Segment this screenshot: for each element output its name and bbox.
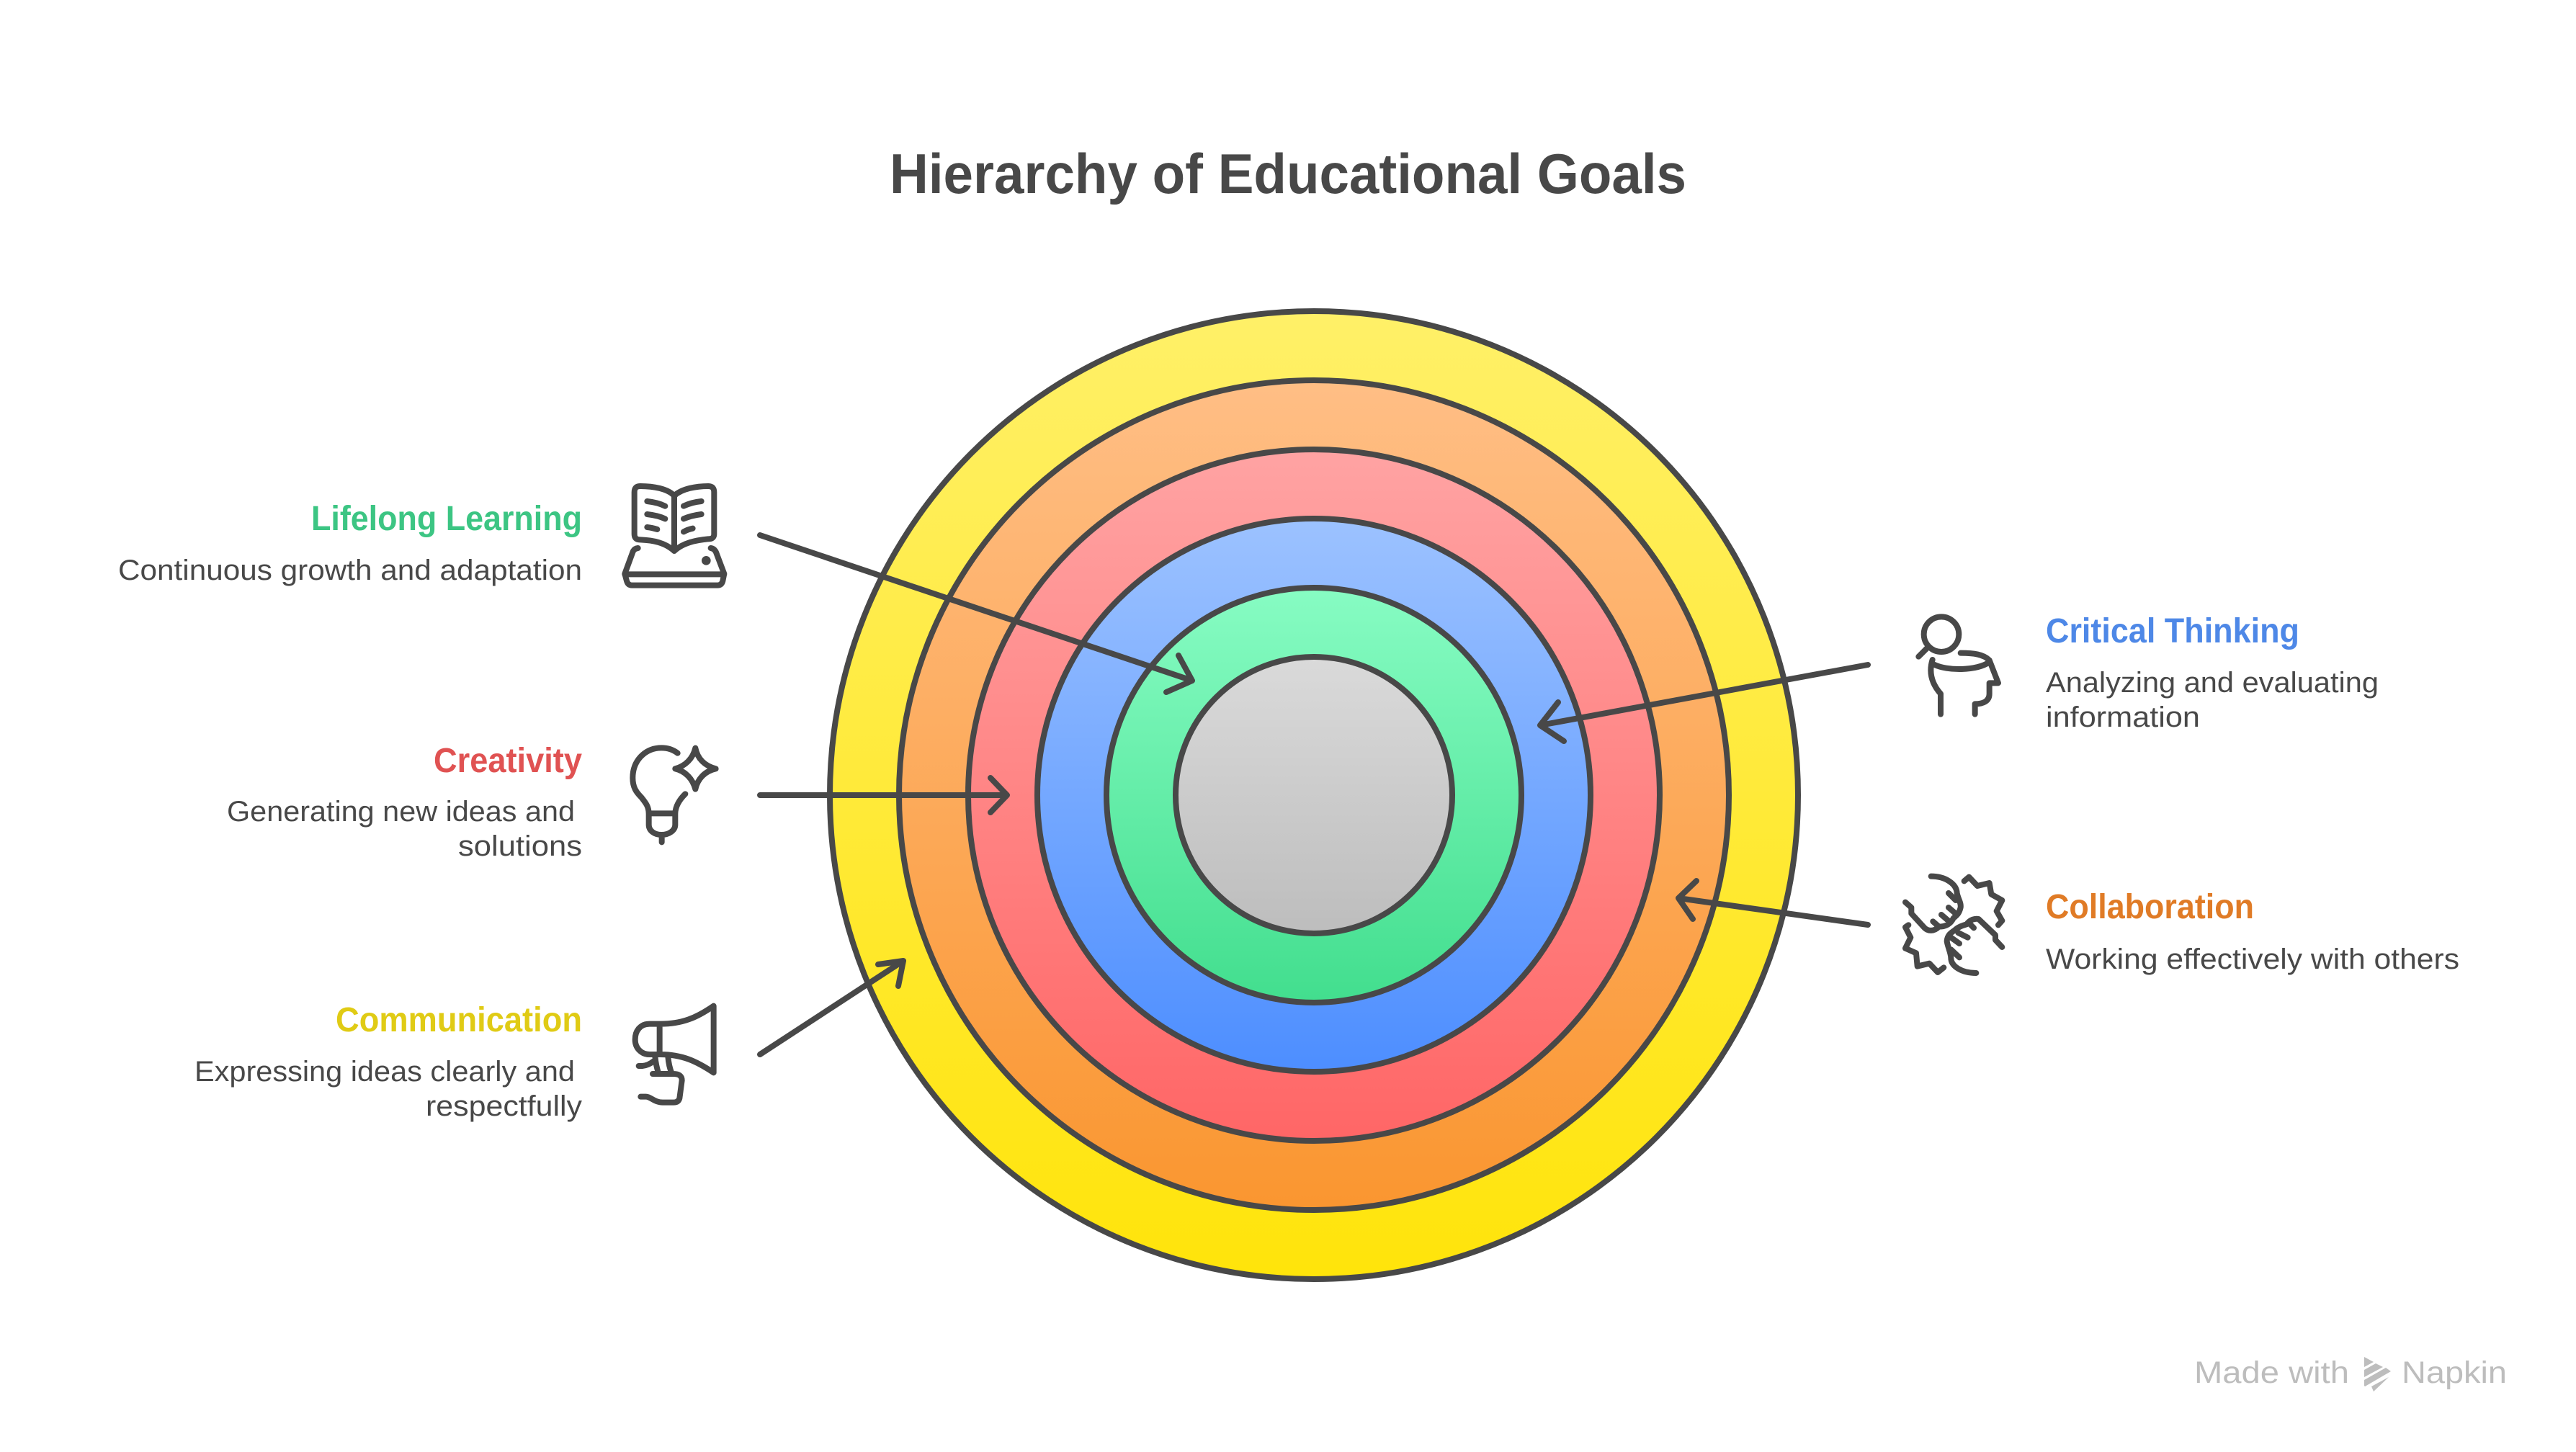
ring: lifelong learning: [1106, 588, 1521, 1003]
arrow: creativity: [760, 778, 1007, 812]
ring: creativity: [968, 449, 1660, 1141]
description: communication: respectfully: [426, 1090, 582, 1122]
ring: critical thinking: [1037, 519, 1591, 1072]
description: creativity: Generating new ideas and: [227, 796, 575, 828]
icon: open book on tablet: [625, 486, 724, 586]
icon: light bulb with sparkle: [632, 748, 716, 842]
arrow: lifelong learning: [760, 535, 1192, 692]
panel: lifelong learning: [118, 500, 582, 586]
heading: collaboration: Collaboration: [2046, 888, 2254, 926]
title: Hierarchy of Educational Goals: [890, 142, 1686, 205]
footer: made with napkin: [2194, 1355, 2507, 1392]
chart: concentric goal circles: [830, 311, 1798, 1279]
arrow: critical thinking: [1540, 665, 1868, 741]
icon: napkin logo: [2364, 1357, 2391, 1392]
panel: creativity: [227, 742, 582, 862]
icon: head with magnifier: [1918, 617, 1998, 714]
panel: communication: [194, 1001, 582, 1122]
ring: communication: [830, 311, 1798, 1279]
description: creativity: solutions: [458, 830, 582, 862]
icon: megaphone in hand: [635, 1006, 714, 1103]
heading: communication: Communication: [336, 1001, 582, 1039]
arrow: collaboration: [1678, 881, 1868, 925]
icon: clasped hands: [1905, 877, 2002, 973]
description: lifelong learning: Continuous growth and adaptation: [118, 555, 582, 586]
panel: collaboration: [2046, 888, 2459, 975]
heading: creativity: Creativity: [434, 742, 582, 780]
description: collaboration: Working effectively with others: [2046, 944, 2459, 975]
footer text: napkin: Napkin: [2402, 1355, 2507, 1390]
heading: lifelong learning: Lifelong Learning: [311, 500, 582, 538]
ring: collaboration: [899, 380, 1729, 1210]
panel: critical thinking: [2046, 612, 2379, 733]
description: communication: Expressing ideas clearly and: [194, 1056, 575, 1088]
footer text: made with: Made with: [2194, 1355, 2349, 1390]
description: critical thinking: Analyzing and evaluating: [2046, 667, 2379, 699]
arrow: communication: [760, 961, 903, 1054]
heading: critical thinking: Critical Thinking: [2046, 612, 2299, 650]
description: critical thinking: information: [2046, 702, 2200, 733]
core circle: [1176, 657, 1452, 933]
